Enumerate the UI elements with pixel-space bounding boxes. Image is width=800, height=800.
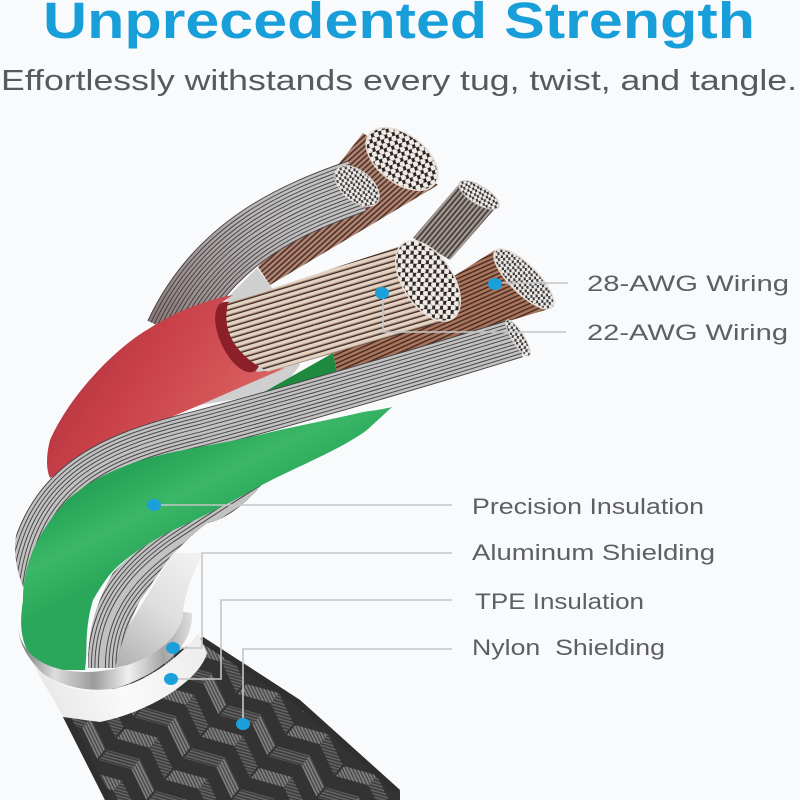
callout: Aluminum Shielding: Aluminum Shielding <box>472 540 715 565</box>
subtitle: Effortlessly withstands every tug, twist, and tangle. <box>1 65 797 97</box>
callout: Precision Insulation <box>147 494 704 519</box>
wire: gray strand bundle, top left <box>172 158 387 332</box>
red insulation <box>47 295 285 478</box>
callout: TPE Insulation: TPE Insulation <box>475 589 644 614</box>
callout: 22-AWG Wiring <box>375 287 788 345</box>
callout: 28-AWG Wiring: 28-AWG Wiring <box>587 271 789 296</box>
wire: gray strand bundle, front <box>24 317 534 592</box>
ring: white TPE band <box>32 633 207 722</box>
callout: 22-AWG Wiring: 22-AWG Wiring <box>587 320 788 345</box>
wire: brown 28-AWG strand bundle <box>333 241 562 373</box>
nylon braided shielding <box>60 630 405 800</box>
callout: Nylon Shielding: Nylon Shielding <box>472 635 665 660</box>
wire: copper 22-AWG strand bundle <box>226 230 473 372</box>
inner white sleeve behind wires <box>170 268 300 405</box>
callout: 28-AWG Wiring <box>488 271 789 296</box>
ring: silver aluminum band <box>18 612 192 690</box>
green insulation <box>21 407 392 670</box>
wire: thin gray-brown strand bundle <box>413 175 503 260</box>
callout: TPE Insulation <box>164 589 644 685</box>
green sleeve behind brown wire <box>250 353 337 400</box>
wire: gray strand bundle under green <box>102 485 268 672</box>
callout: Aluminum Shielding <box>166 540 715 654</box>
callout: Precision Insulation: Precision Insulation <box>472 494 704 519</box>
silver aluminum inner shielding <box>115 553 203 668</box>
wire: thick brown 22-AWG strand bundle, back <box>258 115 449 285</box>
cable illustration <box>18 115 562 800</box>
callout: Nylon Shielding <box>236 635 665 730</box>
